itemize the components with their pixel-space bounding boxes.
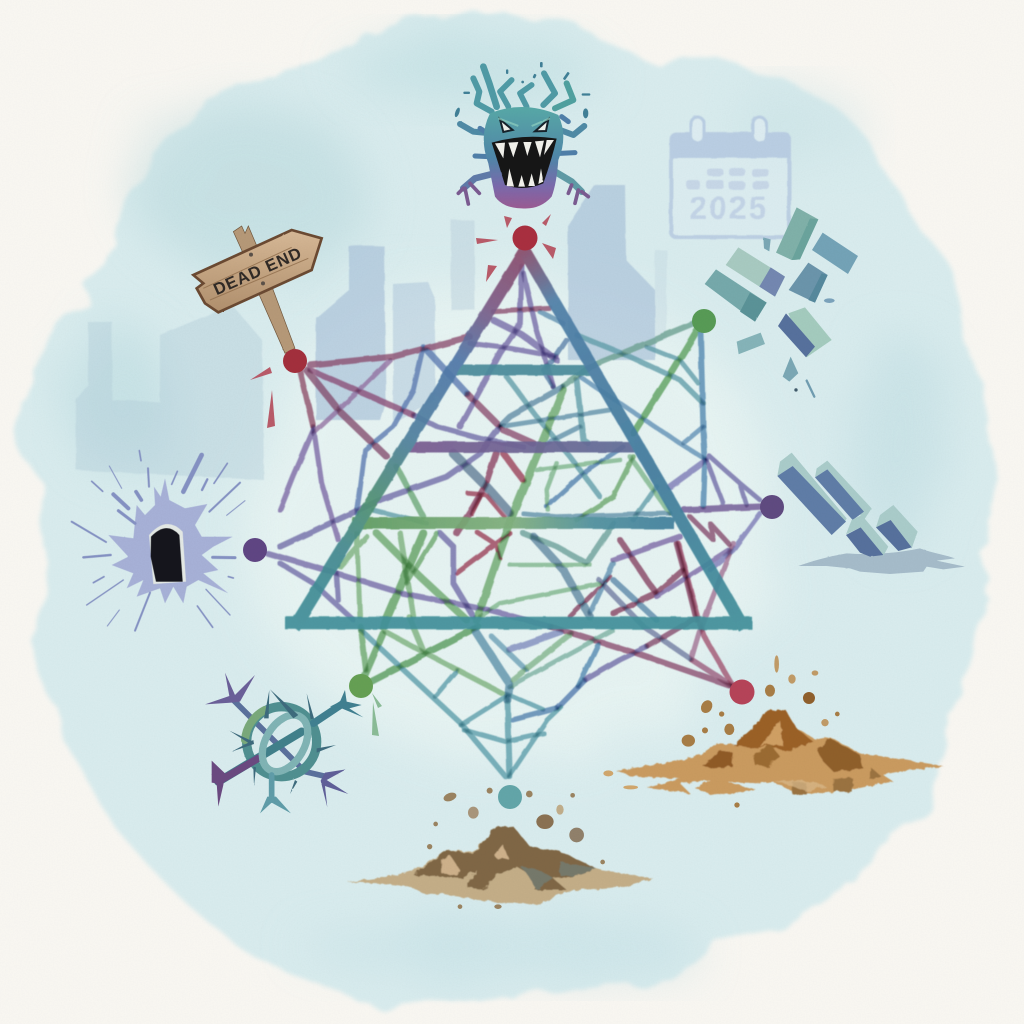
node: lower right red [730, 680, 754, 704]
monster mouth [492, 137, 557, 188]
sign text: DEAD END [211, 243, 305, 299]
icon: dead end sign [193, 226, 322, 353]
flying dirt [427, 788, 605, 909]
mound body [617, 709, 943, 795]
monster horns and limbs [460, 67, 584, 192]
icon: thorn knot [205, 673, 363, 813]
node: upper right green [692, 309, 716, 333]
upper web strands [280, 267, 760, 627]
monster teeth [495, 140, 554, 187]
icon: tunnel burst [72, 451, 245, 631]
node: top red [476, 214, 556, 282]
node: right purple [760, 495, 784, 519]
icon: collapsed blocks [777, 453, 965, 574]
network web [268, 250, 760, 777]
icon: broken bricks [705, 207, 858, 397]
icon: calendar 2025: 2025 [689, 190, 769, 226]
node: bottom teal [498, 785, 522, 809]
rung: top [455, 364, 592, 376]
icon: monster [454, 62, 590, 209]
sign board [193, 230, 322, 312]
node: left purple [243, 538, 267, 562]
icon: dirt mound bottom [347, 788, 653, 909]
flying dirt [603, 655, 840, 808]
rung: third [352, 517, 674, 529]
node: lower left green [349, 674, 382, 736]
lower web strands [268, 543, 733, 777]
monster body [484, 107, 563, 209]
triangle left side [294, 250, 526, 628]
mound body [347, 827, 653, 903]
triangle sides and rungs [285, 250, 752, 628]
sign post [233, 226, 295, 353]
rung: second [408, 442, 636, 452]
web strands [268, 267, 760, 777]
skyline [76, 185, 667, 480]
node: left red [250, 349, 307, 428]
triangle right side [524, 250, 744, 628]
icon: dirt mound right [603, 655, 943, 808]
monster eyes [500, 119, 548, 132]
rung: base [285, 617, 752, 629]
icon: calendar 2025 [670, 117, 790, 237]
